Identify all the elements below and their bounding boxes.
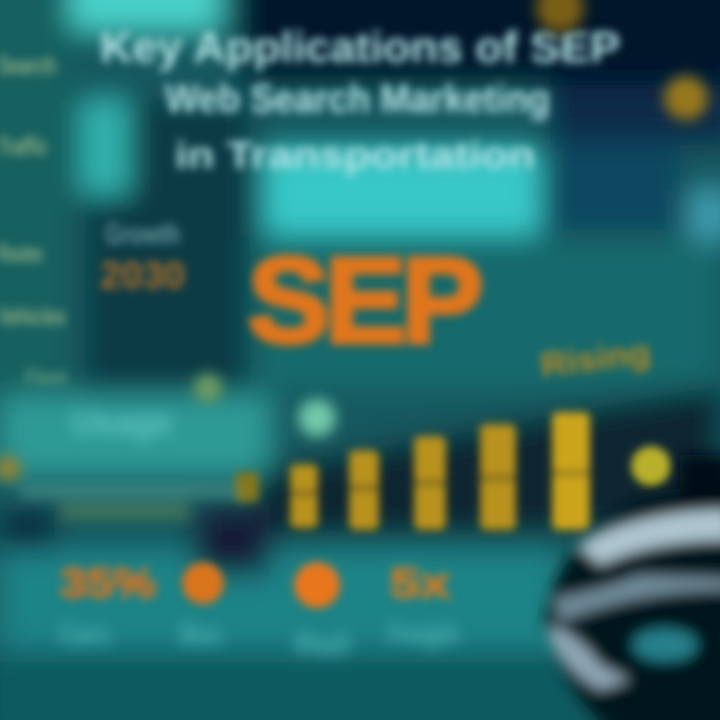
left sidebar labels: Vehicles [0, 301, 66, 331]
chart baseline labels [20, 486, 240, 519]
SEP headline: SEP [248, 232, 483, 368]
orange callout: Rising [539, 333, 652, 385]
left sidebar labels: Fleet [25, 365, 68, 390]
car illustration [545, 455, 720, 720]
sun icon top [536, 0, 708, 120]
left stat block [100, 218, 185, 297]
left caption: Usage [72, 401, 172, 442]
title: Key Applications of SEP [100, 23, 620, 72]
bottom captions: Freight [388, 618, 458, 651]
bottom captions [60, 618, 458, 661]
left sidebar labels: Routes [0, 238, 43, 268]
title: Web Search Marketing [165, 77, 550, 121]
bottom captions: Bus [180, 618, 222, 651]
left caption [0, 374, 336, 481]
bottom captions: Rail [295, 628, 350, 661]
bottom captions: Cars [60, 618, 110, 651]
left stat block: 2030 [100, 255, 185, 297]
left sidebar labels [0, 50, 68, 390]
bottom stats row [60, 559, 451, 608]
left sidebar labels: Traffic [0, 131, 48, 161]
left sidebar labels: Search [0, 50, 56, 80]
title [100, 23, 620, 177]
bottom stats row: 5x [390, 559, 451, 606]
bar chart [235, 412, 671, 530]
bottom stats row: 35% [60, 559, 156, 606]
left stat block: Growth [105, 218, 180, 251]
title: in Transportation [175, 135, 535, 177]
